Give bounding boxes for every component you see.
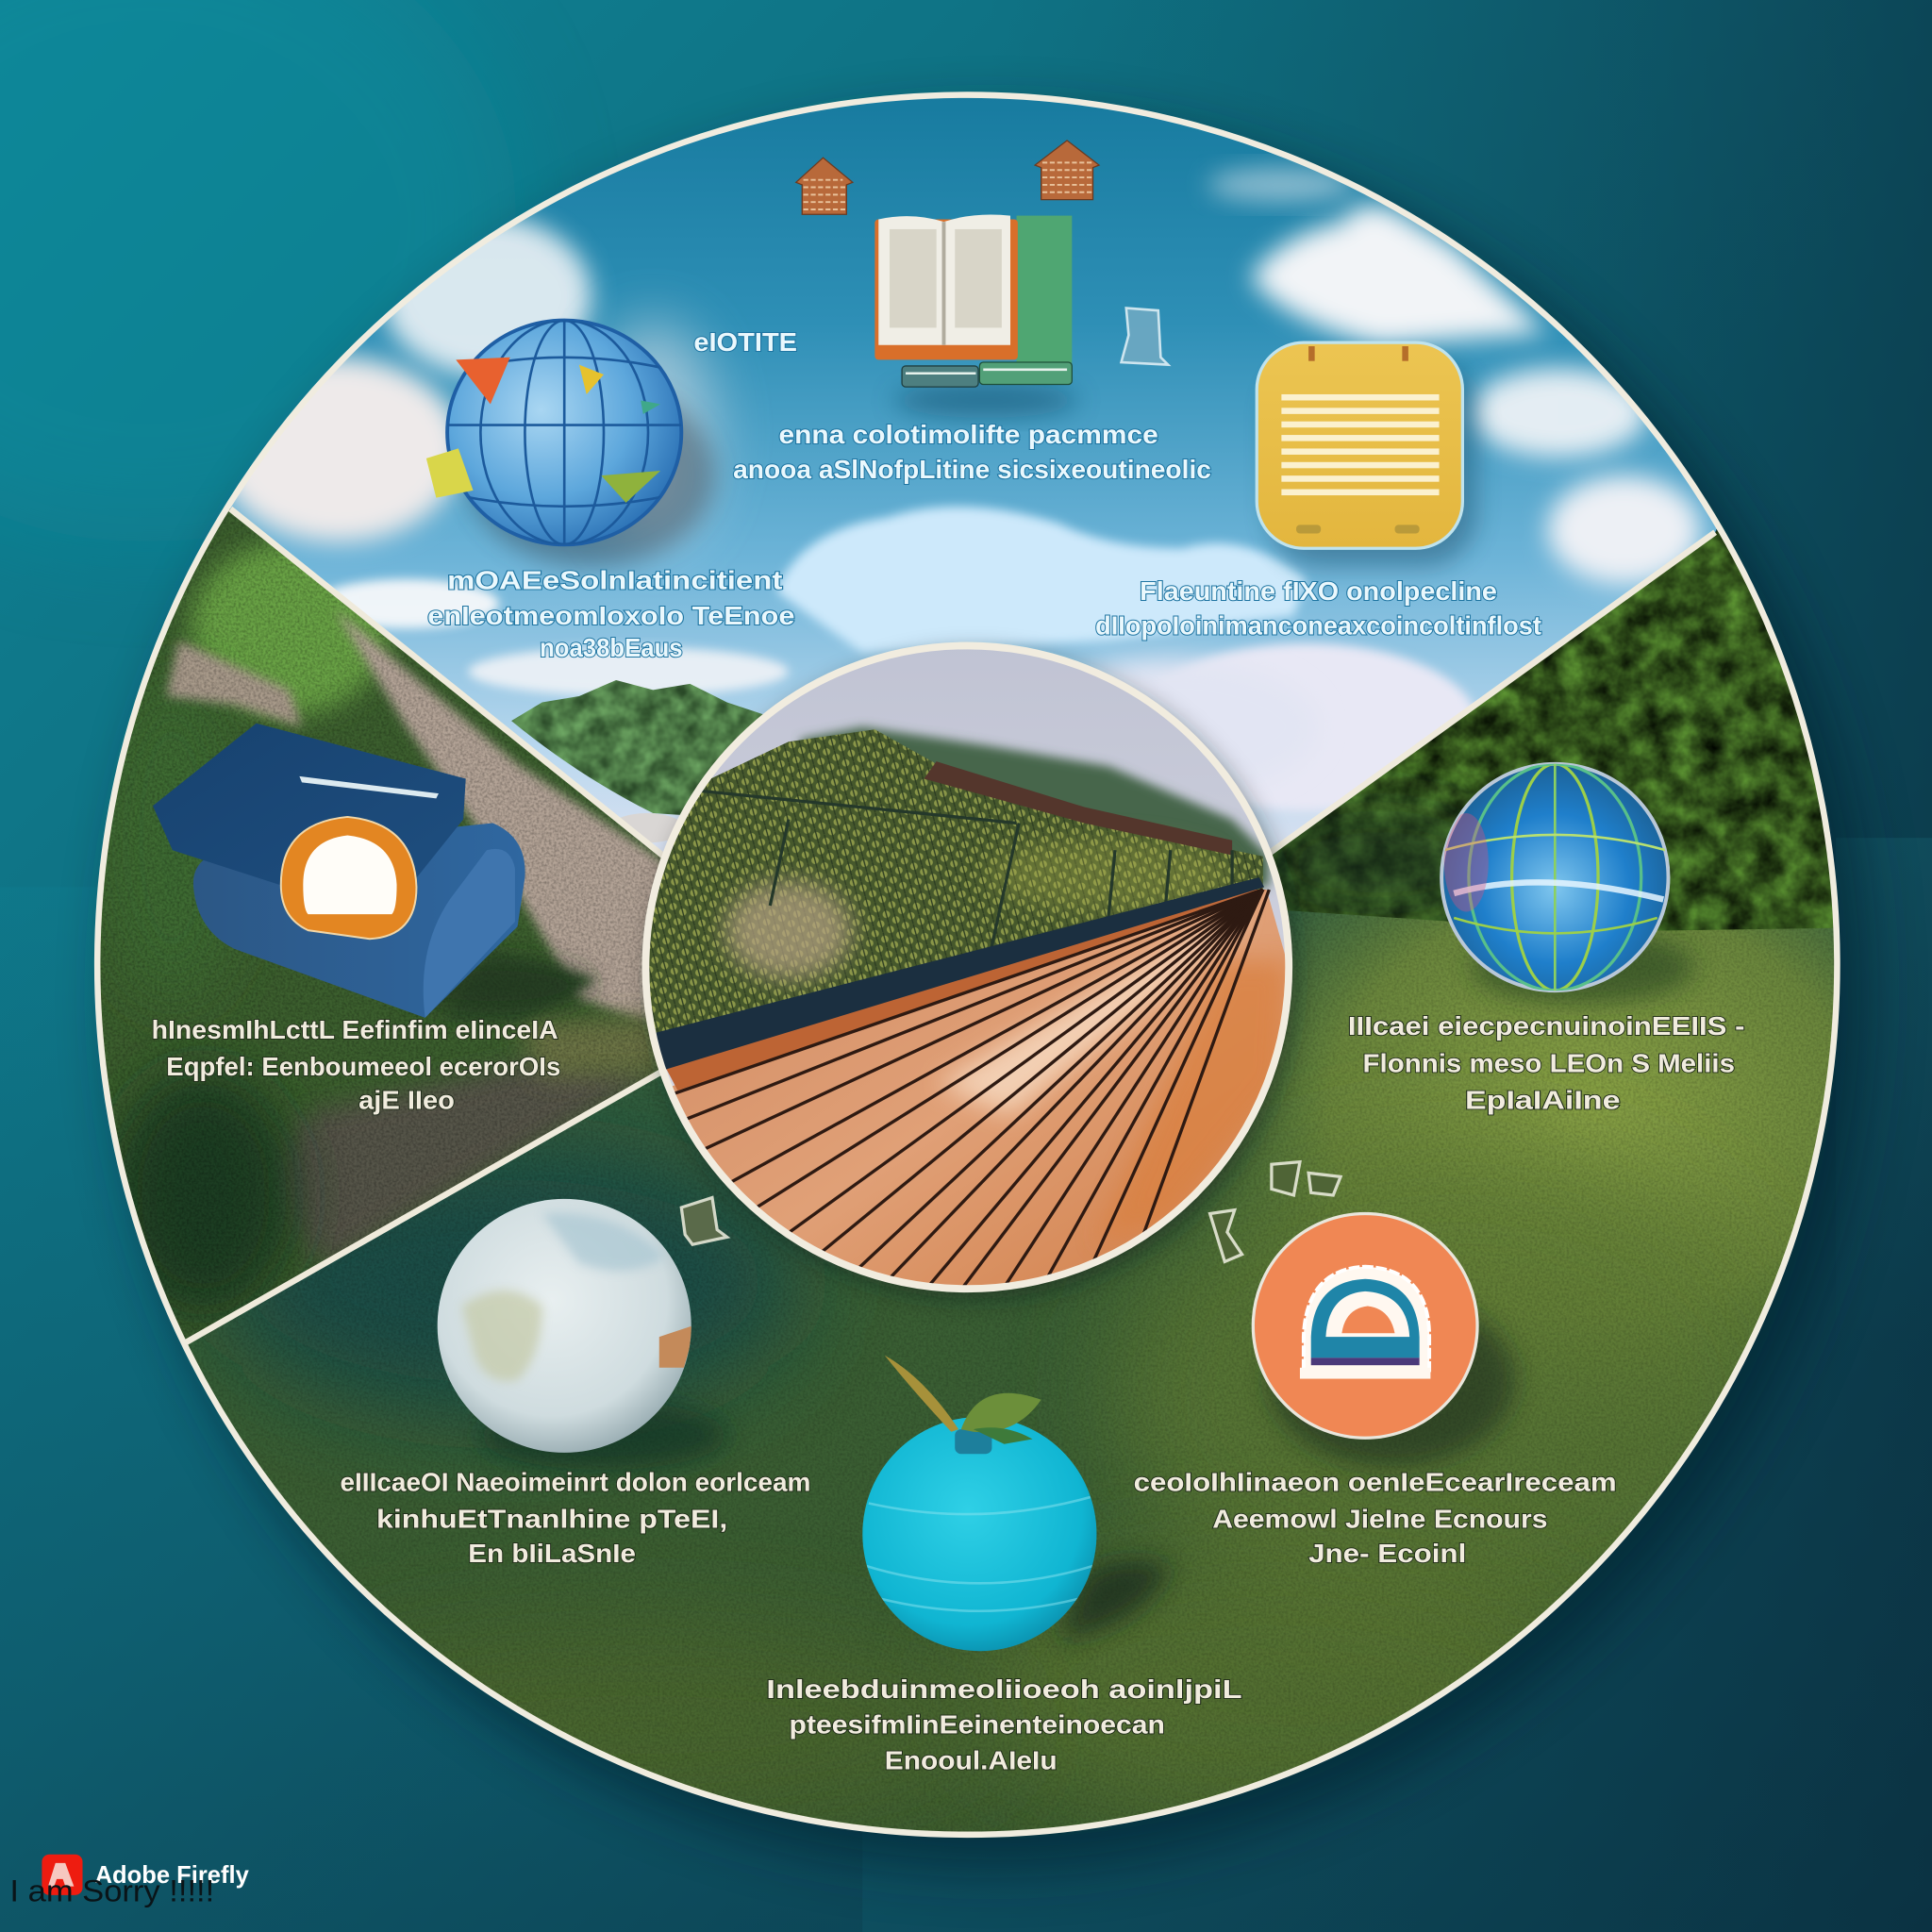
deck planks <box>665 890 1269 1306</box>
text block: top left: enIeotmeomIoxoIo TeEnoe <box>427 601 794 630</box>
text block: lower left: eIIIcaeOI Naeoimeinrt dolon eorlceam <box>340 1467 810 1496</box>
caption: apology note: I am Sorry !!!!! <box>9 1873 214 1907</box>
trees <box>511 680 763 815</box>
rolled bars <box>902 366 978 387</box>
text block: left <box>152 1015 560 1115</box>
panel: central boardwalk photo <box>635 641 1296 1306</box>
text block: bottom centre: pteesifmIinEeinenteinoecan <box>790 1710 1165 1740</box>
text block: left: hInesmIhLcttL Eefinfim eIinceIA <box>152 1015 558 1044</box>
watermark: Adobe Firefly <box>42 1855 249 1895</box>
icon: small sketches lower right <box>1210 1162 1341 1261</box>
text block: lower right: Aeemowl JieIne Ecnours <box>1212 1505 1547 1534</box>
text block: lower left <box>340 1467 810 1568</box>
text block: right <box>1348 1011 1744 1115</box>
badge <box>281 817 416 939</box>
icon: cyan sphere with leaves <box>862 1356 1171 1651</box>
text block: right: IIIcaei eiecpecnuinoinEEIIS - <box>1348 1011 1744 1041</box>
dirt path <box>335 610 665 1029</box>
icon: open book <box>874 215 1078 418</box>
text block: top right: dIIopoIoinimanconeaxcoincoltinflost <box>1095 611 1541 641</box>
deck highlight <box>937 906 1244 1115</box>
text block: lower right: ceoIoIhIinaeon oenIeEcearIreceam <box>1134 1467 1617 1496</box>
icon: orange protractor badge <box>1253 1214 1516 1466</box>
text block: lower left: kinhuEtTnanlhine pTeEI, <box>376 1505 727 1534</box>
icon: wireframe globe with flags <box>426 321 715 567</box>
divider lines <box>185 508 1715 1343</box>
icon: blue books with orange badge <box>153 724 591 1018</box>
text block: top left: noa38bEaus <box>540 633 683 662</box>
text block: top left: mOAEeSolnIatincitient <box>447 565 782 594</box>
text block: bottom centre <box>766 1674 1242 1775</box>
icon: small sketch top <box>1122 308 1168 365</box>
icon: yellow note panel <box>1257 342 1476 567</box>
text block: top left <box>427 565 794 662</box>
panel: forest backdrop <box>1273 530 1834 930</box>
icon: right house <box>1035 141 1099 200</box>
text block: top right <box>1095 576 1541 641</box>
panel: sky section <box>230 98 1717 852</box>
icon: earth sphere <box>438 1199 727 1470</box>
text block: left: Eqpfel: Eenboumeeol ecerorOIs <box>166 1052 560 1081</box>
text block: top centre <box>733 420 1211 484</box>
text block: lower left: En bIiLaSnIe <box>468 1539 636 1568</box>
text block: lower right <box>1134 1467 1617 1568</box>
text block: top small label: eIOTITE <box>693 327 797 357</box>
text block: bottom centre: Enooul.AIeIu <box>885 1746 1058 1775</box>
text block: bottom centre: Inleebduinmeoliioeoh aoinljpiL <box>766 1674 1242 1704</box>
watermark: Adobe Firefly: Adobe Firefly <box>95 1860 249 1889</box>
text block: top centre: anooa aSlNofpLitine sicsixeoutineolic <box>733 455 1211 484</box>
text block: lower right: Jne- Ecoinl <box>1308 1539 1466 1568</box>
boardwalk deck <box>659 890 1293 1306</box>
text block: right: EpIaIAiIne <box>1465 1086 1621 1115</box>
text block: right: Flonnis meso LEOn S Meliis <box>1363 1048 1735 1077</box>
text block: top centre: enna colotimolifte pacmmce <box>778 420 1158 449</box>
rail <box>647 877 1264 1070</box>
icon: colourful glass globe <box>1441 764 1694 1004</box>
text block: top right: Flaeuntine fIXO onolpecline <box>1140 576 1497 606</box>
text block: left: ajE IIeo <box>358 1086 455 1115</box>
icon: left house <box>796 158 853 214</box>
panel: bottom and right meadow <box>189 910 1834 1832</box>
panel: left path scene <box>74 492 690 1380</box>
icon: small sketch lower left <box>681 1198 727 1244</box>
clouds <box>216 168 1700 810</box>
